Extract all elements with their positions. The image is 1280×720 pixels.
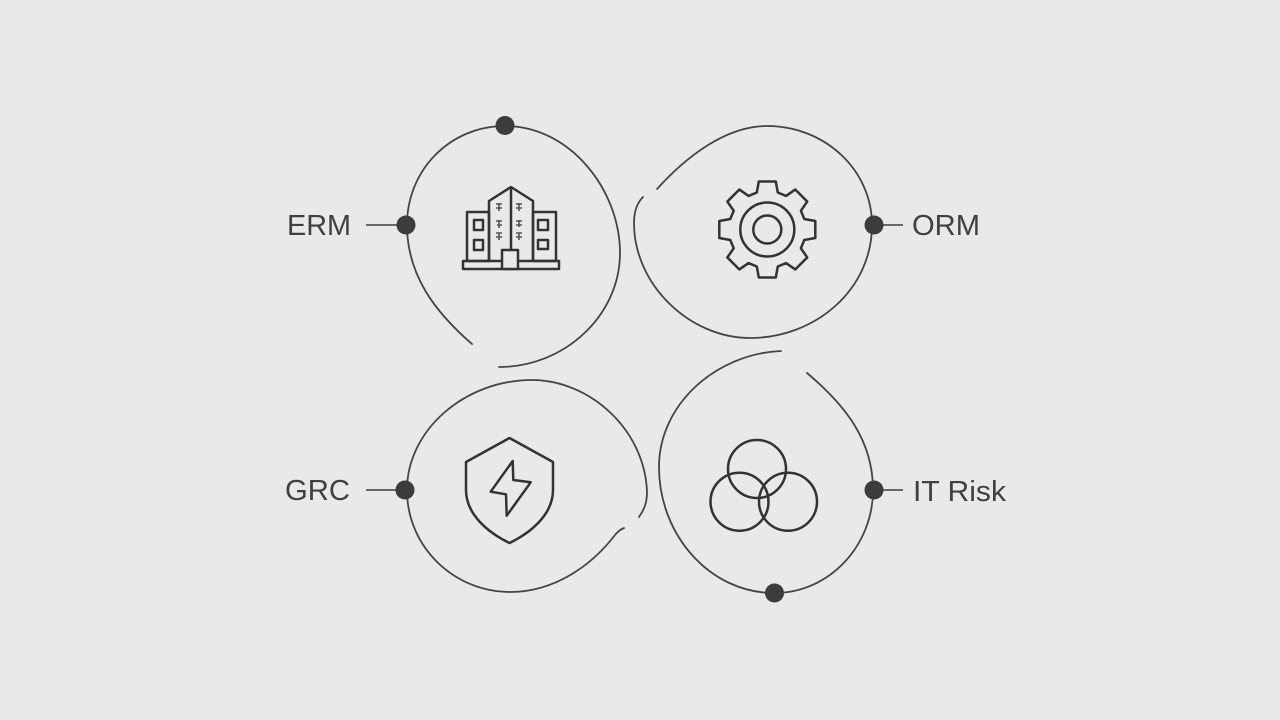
IT Risk bottom node (765, 584, 784, 602)
GRC label: GRC (285, 475, 350, 507)
ERM ring (407, 126, 620, 367)
IT Risk connector (880, 489, 903, 491)
ERM node (396, 216, 416, 234)
ORM label: ORM (912, 210, 980, 242)
IT Risk ring (659, 351, 873, 593)
ORM ring (634, 126, 872, 338)
IT Risk node (864, 480, 884, 500)
ERM connector (366, 224, 398, 226)
icon: three overlapping circles (710, 440, 817, 531)
ORM connector (880, 224, 903, 226)
GRC connector (366, 489, 398, 491)
IT Risk label: IT Risk (913, 476, 1007, 508)
panel: ERM (287, 116, 620, 367)
panel: IT Risk (659, 351, 1007, 602)
ERM top node (496, 116, 514, 135)
panel: ORM (634, 126, 980, 338)
panel: GRC (285, 380, 647, 592)
icon: building (463, 187, 559, 269)
icon: shield with lightning bolt (466, 438, 553, 543)
ORM node (864, 216, 884, 234)
GRC node (396, 480, 414, 500)
icon: gear (719, 182, 815, 278)
GRC ring (407, 380, 647, 592)
ERM label: ERM (287, 210, 351, 242)
